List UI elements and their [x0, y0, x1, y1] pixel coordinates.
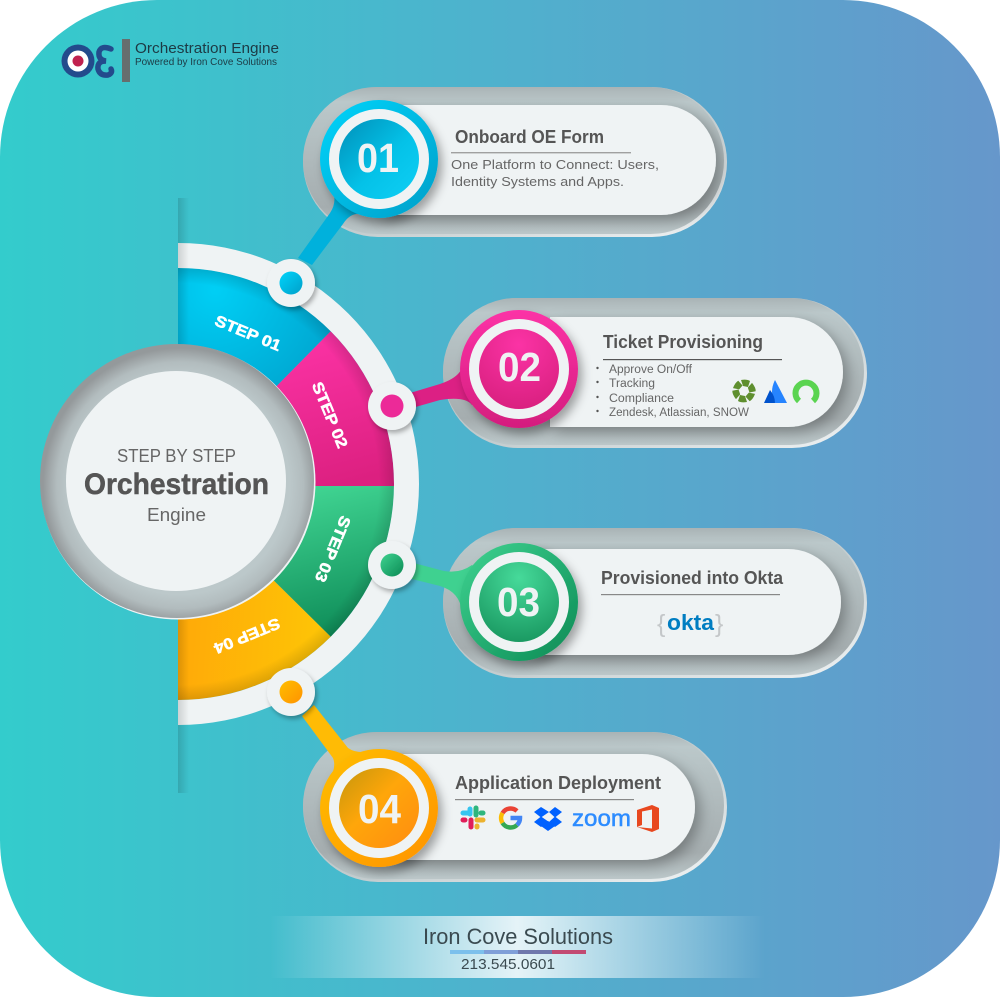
footer contact band: [270, 916, 765, 978]
badge: 02: [460, 310, 578, 428]
connector: step 03: [408, 562, 519, 612]
connector: step 04: [302, 705, 379, 808]
node: step 03: [368, 541, 416, 589]
icon: Atlassian: [764, 380, 787, 403]
badge: 03: [460, 543, 578, 661]
node: step 01: [267, 259, 315, 307]
bullet list: Tracking: [609, 378, 655, 390]
panel: step 04 Application Deployment: [302, 705, 727, 882]
label: STEP 03: STEP 03: [311, 513, 353, 585]
icon: green ring: [796, 383, 816, 401]
logo divider bar: [122, 39, 130, 82]
hub text: STEP BY STEP: STEP BY STEP: [117, 446, 236, 466]
heading rule: [451, 152, 631, 153]
description: [451, 157, 659, 189]
label: STEP 01: STEP 01: [212, 313, 284, 355]
panel: step 01 Onboard OE Form: [298, 87, 727, 265]
segment edge shading: [178, 268, 394, 700]
badge: 02: 02: [498, 344, 541, 390]
heading: Application Deployment: [455, 773, 661, 793]
bullet list: Zendesk, Atlassian, SNOW: [609, 407, 749, 419]
icon: okta logo: }: [715, 610, 723, 638]
white outer ring: [178, 243, 419, 725]
logo name: Orchestration Engine: [135, 41, 279, 57]
node: step 04: [267, 668, 315, 716]
icon: Dropbox: [534, 807, 562, 831]
vertical axis bar: [178, 198, 189, 793]
hub text: Engine: Engine: [147, 505, 206, 525]
panel: step 02 Ticket Provisioning: [410, 298, 867, 448]
icon: Slack: [463, 808, 483, 827]
segment: step 03: [178, 486, 394, 637]
heading: Ticket Provisioning: [603, 332, 763, 352]
phone number: 213.545.0601: [461, 957, 555, 973]
bullet list: Approve On/Off: [609, 364, 693, 376]
icon: okta logo: okta: [667, 610, 715, 635]
connector: step 02: [410, 368, 519, 408]
heading rule: [455, 799, 634, 800]
half-wheel of steps: [178, 243, 419, 725]
icon: Zoom wordmark: zoom: [572, 805, 631, 831]
colour stripe: [450, 950, 586, 954]
heading rule: [601, 594, 780, 595]
badge: 03: 03: [497, 579, 540, 625]
description: One Platform to Connect: Users,: [451, 157, 659, 172]
logo tagline: Powered by Iron Cove Solutions: [135, 57, 277, 68]
icon: okta logo: {: [657, 610, 665, 638]
label: STEP 04: STEP 04: [211, 614, 282, 657]
company name: Iron Cove Solutions: [423, 924, 613, 949]
connector: step 01: [298, 159, 379, 265]
node: step 02: [368, 382, 416, 430]
icon: okta logo: [657, 610, 723, 638]
bullet list: [596, 364, 749, 419]
segment: step 04: [178, 486, 331, 700]
icon: Google: [501, 809, 520, 827]
logo: Orchestration Engine: [62, 39, 279, 82]
central hub: [40, 344, 316, 620]
badge: 01: 01: [357, 135, 399, 181]
heading: Provisioned into Okta: [601, 568, 784, 588]
heading rule: [603, 359, 782, 360]
panel: step 03 Provisioned into Okta: [408, 528, 867, 678]
description: Identity Systems and Apps.: [451, 174, 624, 189]
badge: 04: 04: [358, 786, 401, 832]
segment: step 02: [178, 331, 394, 486]
heading: Onboard OE Form: [455, 127, 604, 147]
label: STEP 02: STEP 02: [308, 380, 350, 451]
hub text: Orchestration: Orchestration: [84, 468, 269, 501]
icon: green flower: [731, 380, 757, 402]
bullet list: Compliance: [609, 393, 674, 405]
badge: 04: [320, 749, 438, 867]
segment: step 01: [178, 268, 331, 486]
icon: OE roundel: [62, 44, 112, 78]
badge: 01: [320, 100, 438, 218]
icon: Office: [637, 805, 659, 832]
